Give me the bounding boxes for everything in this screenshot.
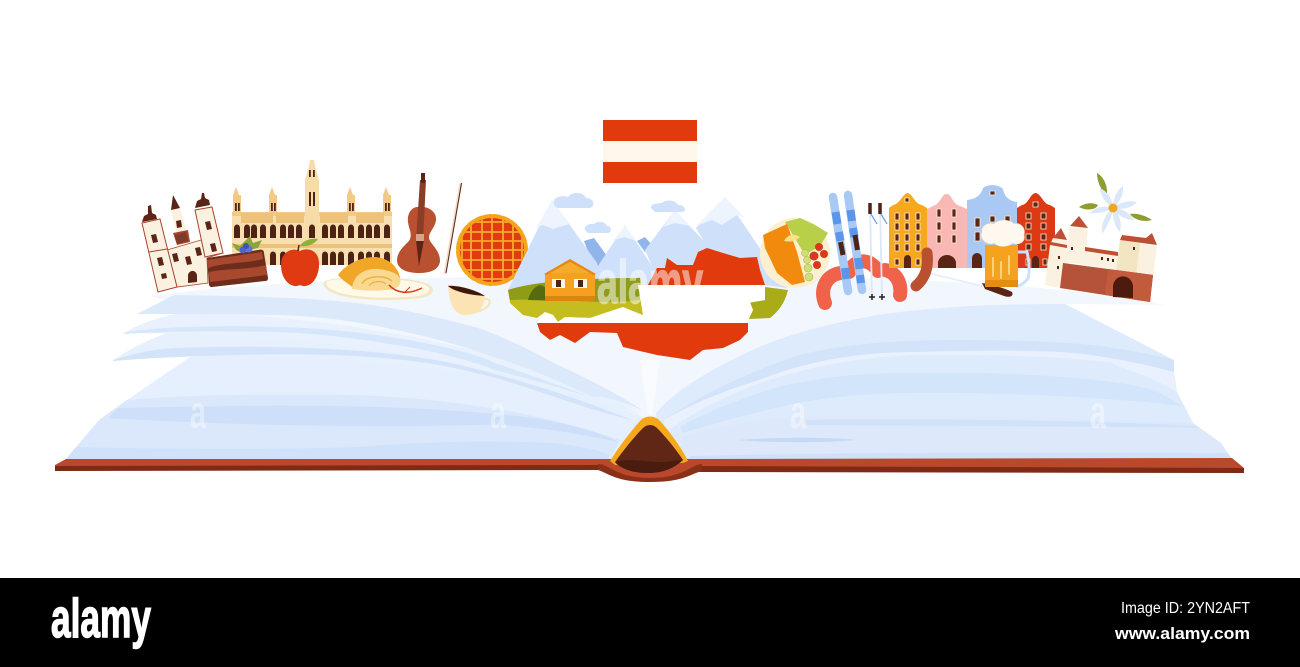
watermark: alamy over map: alamy <box>597 249 703 316</box>
icon: dark green meadow <box>508 278 640 302</box>
strudel: apple slice <box>389 285 422 292</box>
church: body <box>167 240 223 287</box>
icon: schnitzel plate <box>760 218 830 288</box>
book: spine cover curve <box>598 459 702 482</box>
icon: apple strudel on plate <box>324 257 433 300</box>
icon: green hills left <box>508 278 645 322</box>
icon: Vienna city hall <box>232 160 392 265</box>
footer: image id: Image ID: 2YN2AFT <box>1121 600 1250 617</box>
icon: ski poles <box>869 203 887 300</box>
flag of Austria <box>603 120 697 183</box>
icon: violin <box>397 173 440 273</box>
icon: coffee cup <box>448 285 490 315</box>
castle: brick wall <box>1060 263 1153 302</box>
book: left lower pages <box>66 353 645 459</box>
castle: right tower <box>1116 240 1157 278</box>
watermark: small letters on book <box>190 386 1106 438</box>
church: right tower <box>195 207 223 257</box>
book: pale backdrop page <box>150 276 1165 425</box>
book: centre fold glow <box>640 360 660 414</box>
row of colourful houses <box>889 185 1055 268</box>
footer bar <box>0 578 1300 667</box>
icon: red apple <box>281 239 319 286</box>
icon: orange chalet <box>544 259 596 301</box>
book: left upper leaves <box>113 295 642 420</box>
book: cover left edge <box>55 459 605 471</box>
book: spine arch <box>610 416 688 473</box>
church: windows <box>151 220 217 279</box>
church: left tower <box>142 219 177 292</box>
open book <box>55 276 1244 482</box>
icon: bush <box>528 285 564 301</box>
footer: alamy logo: alamy <box>51 587 151 649</box>
castle: gate <box>1113 276 1133 298</box>
icon: lattice pie <box>455 215 530 285</box>
icon: castle <box>1045 216 1157 302</box>
icon: violin bow <box>445 183 462 274</box>
icon: church with towers <box>142 193 223 292</box>
map of Austria in flag colours <box>537 248 765 360</box>
church: centre tower <box>171 208 187 235</box>
map: white band <box>537 285 765 323</box>
icon: chocolate cake <box>207 236 268 287</box>
house windows <box>895 191 1047 265</box>
house: blue <box>967 185 1017 268</box>
watermark: small letters on book: a <box>490 386 506 438</box>
strudel: roll <box>338 257 400 290</box>
house: red <box>1017 193 1055 268</box>
map: red top <box>638 248 765 285</box>
cloud left <box>554 193 593 208</box>
city hall: side turrets <box>233 187 391 212</box>
cloud right <box>651 201 685 212</box>
icon: mountains with clouds <box>508 193 787 290</box>
cloud middle <box>585 222 611 233</box>
book: right pages <box>656 304 1232 459</box>
icon: green hills right <box>748 287 788 319</box>
castle: second tower <box>1067 227 1088 265</box>
icon: edelweiss <box>1079 173 1152 234</box>
icon: sausage ring <box>823 261 900 303</box>
castle: left tower <box>1045 238 1070 290</box>
watermark: small letters on book: a <box>190 386 206 438</box>
castle: middle wall <box>1083 247 1118 270</box>
house: pink <box>927 194 967 268</box>
city hall: central tower <box>305 160 319 264</box>
map: red bottom <box>537 323 748 360</box>
house doors <box>904 253 1039 268</box>
footer: website: www.alamy.com <box>1114 624 1250 643</box>
watermark: small letters on book: a <box>790 386 806 438</box>
book: cover right edge <box>690 458 1244 473</box>
watermark: small letters on book: a <box>1090 386 1106 438</box>
church: door <box>188 271 197 283</box>
icon: skis <box>833 195 862 291</box>
house: yellow <box>889 193 927 268</box>
icon: beer mug <box>981 220 1029 287</box>
icon: sausage on fork <box>916 253 1013 297</box>
